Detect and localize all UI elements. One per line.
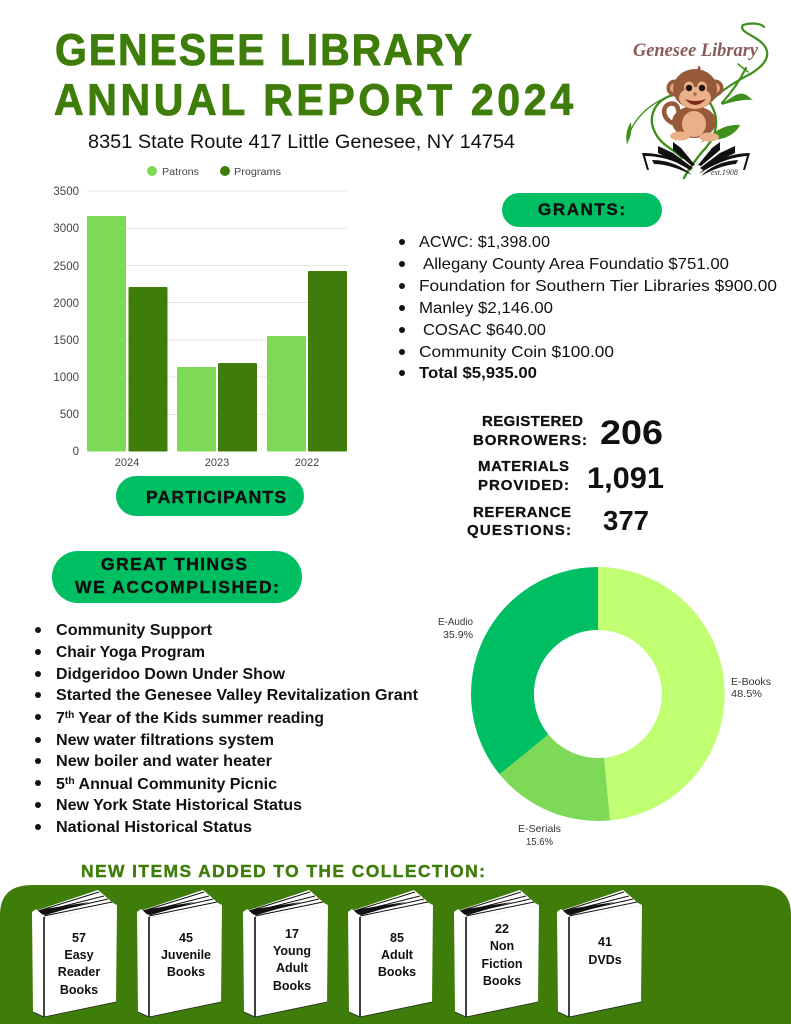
participants pill: PARTICIPANTS (146, 487, 286, 507)
book: non fiction: Non (490, 939, 514, 953)
logo vines (627, 24, 767, 178)
book: adult: 85 (390, 931, 404, 945)
book: non fiction: Books (483, 974, 521, 988)
grants list: Allegany County Area Foundatio $751.00 (423, 256, 729, 273)
book: non fiction: Fiction (482, 957, 522, 971)
collection heading: NEW ITEMS ADDED TO THE COLLECTION: (81, 861, 485, 881)
participants pill (116, 476, 304, 516)
y axis labels: 3000 (53, 223, 79, 235)
accomplishments list: Didgeridoo Down Under Show (56, 666, 286, 683)
logo leaves (722, 94, 753, 105)
accomplishments heading: GREAT THINGS (101, 554, 247, 574)
grants list: Community Coin $100.00 (419, 344, 614, 361)
grants list: Manley $2,146.00 (419, 300, 553, 317)
stat: materials provided: MATERIALS (478, 458, 569, 475)
accomplishments list: Annual Community Picnic (75, 776, 277, 793)
book: adult (348, 890, 433, 1017)
stat: materials provided: PROVIDED: (478, 477, 569, 494)
accomplishments list: New boiler and water heater (56, 753, 272, 770)
segment: e-books (598, 567, 725, 820)
book: easy reader: 57 (72, 931, 86, 945)
y axis labels: 2000 (53, 298, 79, 310)
open book emblem (642, 142, 750, 176)
accomplishments list: Chair Yoga Program (56, 644, 205, 661)
accomplishments list: Year of the Kids summer reading (74, 710, 324, 727)
donut labels: 15.6% (526, 836, 553, 848)
logo (626, 24, 767, 178)
y axis labels (53, 186, 79, 458)
stat: registered borrowers: REGISTERED (482, 413, 583, 430)
book: dvds: 41 (598, 935, 612, 949)
stat: registered borrowers: 206 (600, 414, 663, 452)
logo text: Genesee Library (633, 41, 759, 61)
book: adult: Books (378, 965, 416, 979)
collection band (0, 885, 791, 1024)
book: easy reader (32, 890, 117, 1017)
monkey (664, 65, 724, 142)
x axis labels: 2023 (205, 457, 229, 469)
accomplishments list: 7 (56, 710, 65, 727)
y axis labels: 1500 (53, 335, 79, 347)
book: easy reader: Books (60, 983, 98, 997)
accomplishments list: New water filtrations system (56, 732, 274, 749)
stat: registered borrowers (473, 413, 663, 452)
bars (87, 216, 347, 452)
book: non fiction: 22 (495, 922, 509, 936)
stat: registered borrowers: BORROWERS: (473, 432, 587, 449)
grants list (399, 234, 777, 382)
book: non fiction (454, 890, 539, 1017)
title: ANNUAL REPORT 2024 (54, 76, 573, 125)
grants list: COSAC $640.00 (423, 322, 546, 339)
book: easy reader: Easy (64, 948, 94, 962)
address: 8351 State Route 417 Little Genesee, NY 14754 (88, 131, 515, 153)
book: young adult (243, 890, 328, 1017)
accomplishments list: th (65, 776, 75, 787)
accomplishments heading (52, 551, 302, 603)
grants heading (502, 193, 662, 227)
donut chart (438, 567, 771, 848)
donut labels: E-Serials (518, 823, 561, 835)
book: easy reader: Reader (58, 965, 100, 979)
accomplishments heading: WE ACCOMPLISHED: (75, 577, 279, 597)
accomplishments list: th (65, 710, 74, 721)
grants list: ACWC: $1,398.00 (419, 234, 550, 251)
x axis labels: 2024 (115, 457, 139, 469)
donut labels: E-Audio (438, 616, 473, 628)
stat: reference questions: QUESTIONS: (467, 522, 571, 539)
segment: e-serials (500, 734, 610, 821)
book: young adult: 17 (285, 927, 299, 941)
donut labels: E-Books (731, 676, 771, 688)
accomplishments list: 5 (56, 776, 65, 793)
book: dvds: DVDs (588, 953, 622, 967)
accomplishments list (35, 622, 418, 836)
book: young adult: Young (273, 944, 311, 958)
book: juvenile: Books (167, 965, 205, 979)
stat: materials provided: 1,091 (587, 462, 664, 495)
donut labels: 35.9% (443, 629, 473, 641)
accomplishments list: National Historical Status (56, 819, 252, 836)
grants heading: GRANTS: (538, 200, 625, 219)
y axis labels: 3500 (53, 186, 79, 198)
y axis labels: 500 (60, 409, 79, 421)
stat: materials provided (478, 458, 664, 495)
book: adult: Adult (381, 948, 414, 962)
donut labels (438, 616, 771, 848)
stat: reference questions: 377 (603, 505, 649, 536)
title: GENESEE LIBRARY (55, 26, 472, 75)
stat: reference questions (467, 504, 649, 539)
chart legend: Programs (234, 166, 281, 178)
donut labels: 48.5% (731, 688, 762, 700)
chart legend (147, 166, 281, 178)
bar chart: participants (53, 166, 347, 469)
grants list: Total $5,935.00 (419, 365, 537, 382)
y axis labels: 1000 (53, 372, 79, 384)
book: juvenile (137, 890, 222, 1017)
y axis labels: 2500 (53, 261, 79, 273)
book: young adult: Adult (276, 961, 309, 975)
title (54, 26, 573, 125)
chart legend: Patrons (162, 166, 199, 178)
stat: reference questions: REFERANCE (473, 504, 571, 521)
segment: e-audio (471, 567, 598, 774)
x axis labels (115, 457, 319, 469)
grants list: Foundation for Southern Tier Libraries $900.00 (419, 278, 777, 295)
book: young adult: Books (273, 979, 311, 993)
x axis labels: 2022 (295, 457, 319, 469)
book: dvds (557, 890, 642, 1017)
est. 1908: est.1908 (711, 168, 738, 177)
accomplishments list: Started the Genesee Valley Revitalization Grant (56, 687, 418, 704)
book: juvenile: 45 (179, 931, 193, 945)
accomplishments list: Community Support (56, 622, 212, 639)
book: juvenile: Juvenile (161, 948, 211, 962)
accomplishments list: New York State Historical Status (56, 797, 302, 814)
y axis labels: 0 (73, 446, 79, 458)
